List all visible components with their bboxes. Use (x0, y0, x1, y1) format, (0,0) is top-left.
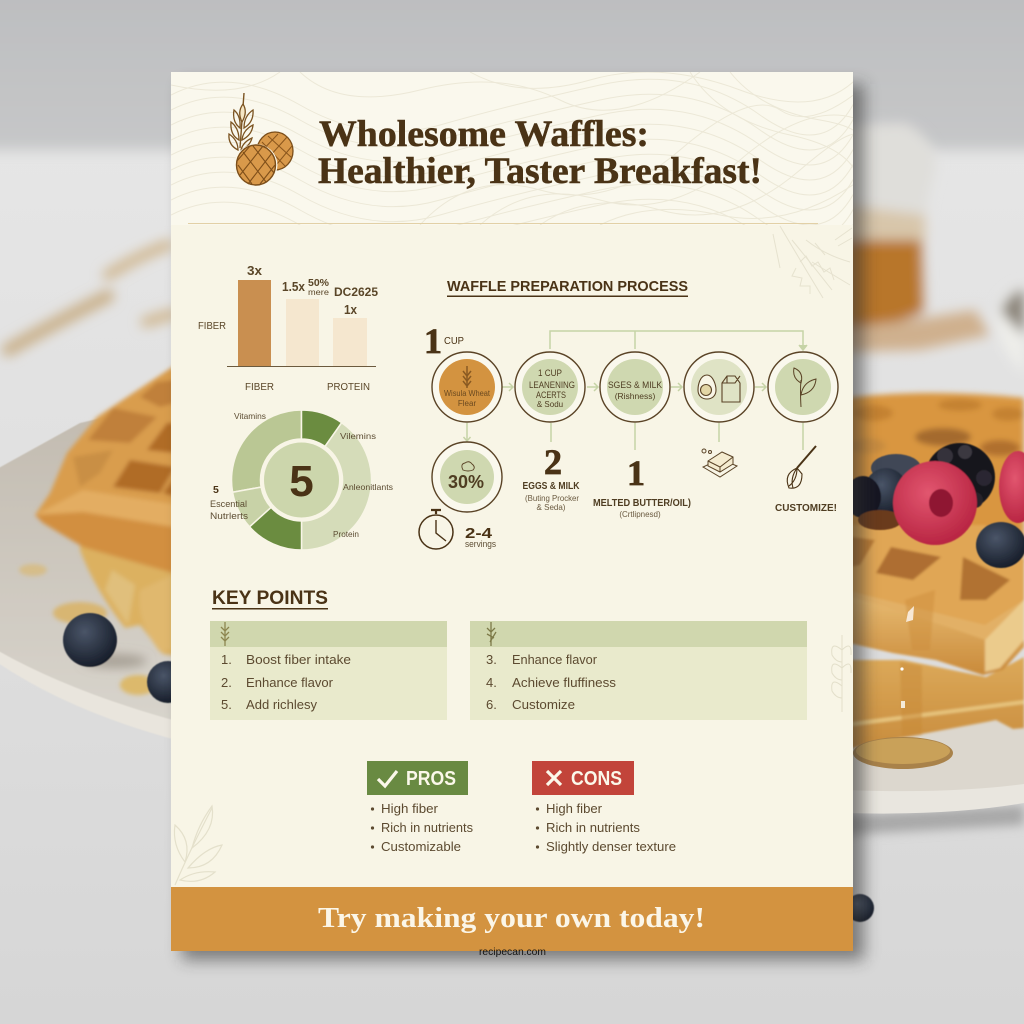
icon: wheat sprig (221, 622, 229, 646)
timer: servings (419, 510, 496, 550)
icon: herb sprig (487, 622, 496, 646)
donut chart: 5 (289, 457, 314, 506)
process step 1: flour: Wisula Wheat (444, 389, 491, 398)
process step 2: leavening: ACERTS (536, 390, 566, 400)
title: Healthier, Taster Breakfast! (318, 151, 762, 192)
process connectors (464, 331, 807, 450)
annotation: melted butter: 1 (627, 453, 645, 493)
annotation: melted butter (593, 453, 691, 519)
cons panel (532, 761, 676, 854)
process step 4: egg and carton icon (684, 352, 754, 422)
title: Wholesome Waffles: (319, 114, 649, 155)
process step 2: leavening: 1 CUP (538, 368, 562, 378)
icon: whisk and customize label (775, 446, 837, 514)
bar chart: PROTEIN (327, 382, 370, 393)
donut chart: 5 (213, 484, 219, 496)
process step 2: leavening (515, 352, 585, 422)
title (318, 114, 762, 192)
blueberries left (63, 613, 189, 703)
key points panel left: Enhance flavor (246, 675, 334, 690)
donut chart: Vilemins (340, 431, 376, 441)
berries right (845, 443, 1024, 922)
pros panel: Customizable (381, 839, 461, 854)
bar chart: 50% (308, 277, 330, 289)
header wave pattern (171, 72, 853, 225)
icon: whisk and customize label: CUSTOMIZE! (775, 503, 837, 514)
bar chart: 1x (344, 303, 357, 317)
process step 2: leavening: & Sodu (537, 400, 563, 409)
process step 3: eggs and milk: (Rishness) (615, 391, 655, 401)
key points panel left: 2. (221, 675, 232, 690)
annotation: eggs and milk: (Buting Procker (525, 494, 579, 503)
process step 1: flour: Flear (458, 399, 476, 408)
cons panel: High fiber (546, 801, 603, 816)
timer: servings: servings (465, 539, 496, 550)
30 percent callout (432, 442, 502, 512)
process step 1: flour (424, 321, 502, 422)
process step 1: flour: CUP (444, 336, 464, 347)
process step 1: flour: 1 (424, 321, 442, 361)
process step 3: eggs and milk: SGES & MILK (608, 380, 663, 391)
key points panel right (470, 621, 807, 720)
process step 5: plant icon (768, 352, 838, 422)
key points heading: KEY POINTS (212, 587, 328, 609)
pros panel: Rich in nutrients (381, 820, 473, 835)
process heading: WAFFLE PREPARATION PROCESS (447, 278, 688, 295)
key points panel right: 4. (486, 675, 497, 690)
key points panel left: 5. (221, 697, 232, 712)
key points panel left: Boost fiber intake (246, 652, 351, 667)
donut chart: Protein (333, 529, 359, 539)
key points panel right: Enhance flavor (512, 652, 598, 667)
pros panel: PROS (406, 768, 456, 790)
annotation: melted butter: (Crtlipnesd) (619, 510, 661, 519)
poster card (171, 72, 865, 951)
bar chart: 3x (247, 264, 262, 278)
donut chart (210, 410, 393, 550)
annotation: melted butter: MELTED BUTTER/OIL) (593, 498, 691, 509)
key points panel right: 3. (486, 652, 497, 667)
process step 2: leavening: LEANENING (529, 380, 575, 390)
bar chart: DC2625 (334, 287, 379, 299)
source credit: recipecan.com (479, 947, 546, 958)
donut chart: Escential (210, 499, 247, 509)
process step 3: eggs and milk (600, 352, 670, 422)
decorative wheat bottom left (174, 806, 222, 885)
key points panel right: 6. (486, 697, 497, 712)
pros panel (367, 761, 473, 854)
annotation: eggs and milk: 2 (544, 442, 562, 482)
cons panel: Slightly denser texture (546, 839, 676, 854)
bar chart (198, 264, 379, 393)
key points panel left: 1. (221, 652, 232, 667)
logo: wheat and waffles (229, 93, 293, 186)
card drop shadow (182, 84, 864, 960)
cons panel: CONS (571, 768, 622, 790)
icon: butter (702, 449, 737, 477)
footer banner: Try making your own today! (318, 902, 705, 934)
bar chart: 1.5x (282, 280, 305, 294)
annotation: eggs and milk: & Seda) (537, 503, 566, 512)
bar chart: FIBER (245, 382, 274, 393)
timer: servings: 2-4 (465, 525, 493, 542)
left waffle (19, 362, 180, 695)
annotation: eggs and milk: EGGS & MILK (522, 481, 580, 492)
footer banner (171, 887, 853, 951)
pros panel: High fiber (381, 801, 439, 816)
key points panel right: Customize (512, 697, 575, 712)
left plate (0, 400, 180, 741)
annotation: eggs and milk (522, 442, 580, 512)
decorative wheat right (832, 635, 851, 712)
donut chart: Vitamins (234, 411, 266, 421)
bar chart: mere (308, 288, 330, 297)
donut chart: Nutrlerts (210, 511, 249, 521)
bar chart: FIBER (198, 321, 226, 332)
right plate and waffles (845, 393, 1024, 835)
key points panel left (210, 621, 447, 720)
30 percent callout: 30% (448, 472, 484, 492)
decorative wheat top right (773, 226, 852, 298)
donut chart: Anleonitlants (343, 482, 393, 492)
key points panel right: Achieve fluffiness (512, 675, 617, 690)
cons panel: Rich in nutrients (546, 820, 640, 835)
key points panel left: Add richlesy (246, 697, 317, 712)
